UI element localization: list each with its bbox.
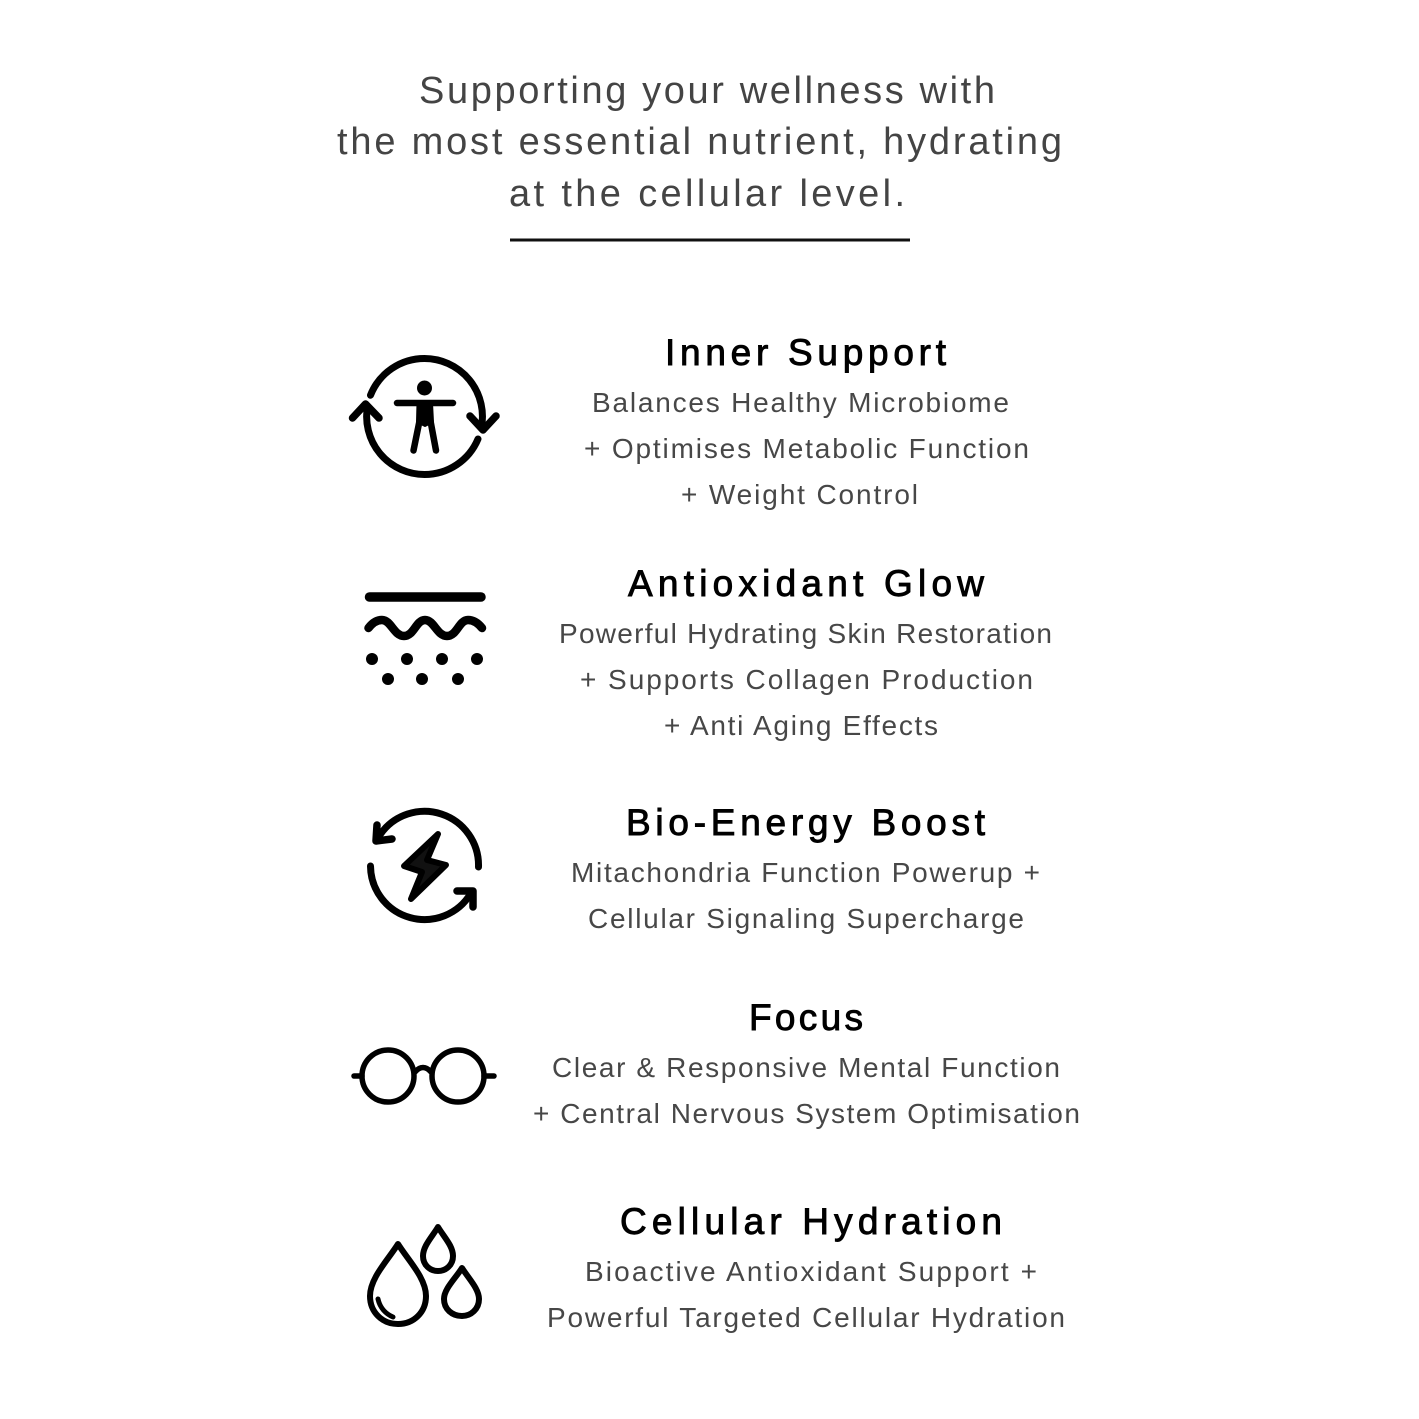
description: Powerful Targeted Cellular Hydration (547, 1302, 1065, 1333)
description: Clear & Responsive Mental Function (552, 1052, 1060, 1083)
panel: focus (354, 997, 1080, 1129)
description (547, 1256, 1065, 1333)
heading: Inner Support (665, 332, 947, 373)
icon: skin layers (366, 597, 483, 685)
panel: inner support (352, 332, 1029, 510)
title (337, 70, 1062, 215)
description (571, 857, 1040, 934)
icon: lightning bolt with circular arrows (370, 811, 479, 920)
description: + Central Nervous System Optimisation (533, 1098, 1080, 1129)
icon: round glasses (354, 1050, 494, 1102)
icon: body with circular arrows (352, 358, 496, 475)
heading: Bio-Energy Boost (626, 802, 986, 843)
description: + Anti Aging Effects (664, 710, 938, 741)
description (533, 1052, 1080, 1129)
description (584, 387, 1029, 510)
heading: Antioxidant Glow (628, 563, 984, 604)
title underline (510, 238, 910, 242)
description (559, 618, 1052, 741)
description: Mitachondria Function Powerup + (571, 857, 1040, 888)
panel: antioxidant glow (366, 563, 1052, 741)
description: + Weight Control (681, 479, 918, 510)
title: the most essential nutrient, hydrating (337, 121, 1062, 163)
description: + Supports Collagen Production (580, 664, 1033, 695)
description: Cellular Signaling Supercharge (588, 903, 1024, 934)
panel: bio-energy boost (370, 802, 1040, 934)
title: Supporting your wellness with (419, 70, 995, 112)
icon: water drops (370, 1227, 479, 1324)
description: + Optimises Metabolic Function (584, 433, 1029, 464)
title: at the cellular level. (509, 173, 905, 215)
description: Balances Healthy Microbiome (592, 387, 1009, 418)
description: Bioactive Antioxidant Support + (585, 1256, 1037, 1287)
heading: Focus (749, 997, 863, 1038)
heading: Cellular Hydration (620, 1201, 1002, 1242)
description: Powerful Hydrating Skin Restoration (559, 618, 1052, 649)
panel: cellular hydration (370, 1201, 1065, 1333)
